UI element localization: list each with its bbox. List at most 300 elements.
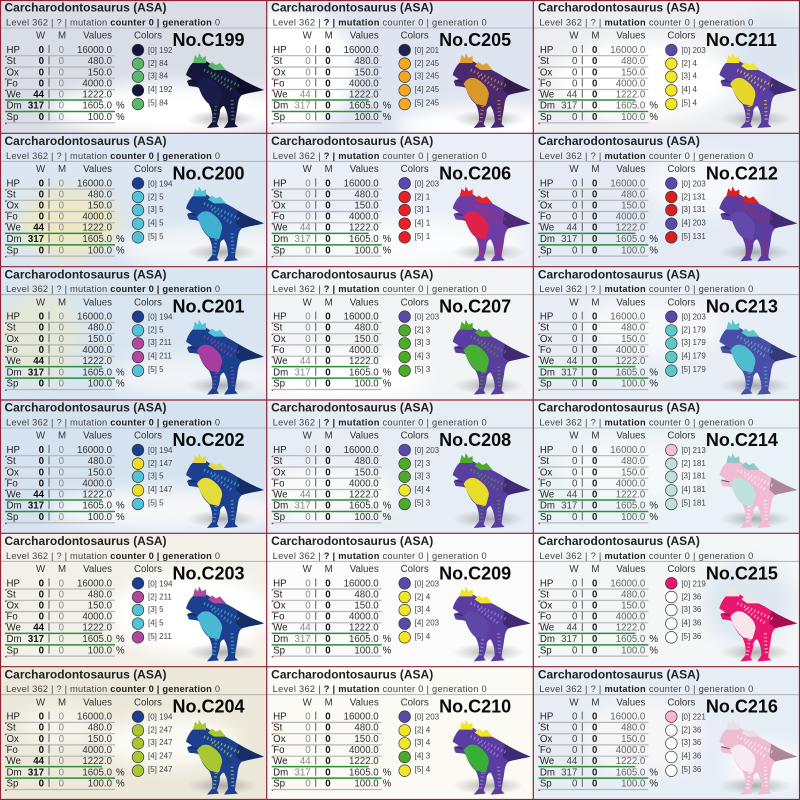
stats table: 0 <box>325 334 331 345</box>
stats table: We <box>273 356 288 367</box>
stats table: % <box>116 645 125 656</box>
stats table: 0 <box>572 312 578 323</box>
stats table: 0 <box>325 578 331 589</box>
stats table: 44 <box>567 623 578 634</box>
stats table: 0 <box>592 745 597 756</box>
stats table: Dm <box>273 234 288 245</box>
stats table: 0 <box>305 723 311 734</box>
stats table: 0 <box>59 112 65 123</box>
stats table: 16000.0 <box>344 712 379 723</box>
stats table: HP <box>540 312 553 323</box>
stats table: 4000.0 <box>616 345 646 356</box>
stats table: 0 <box>59 623 65 634</box>
stats table: Fo <box>6 78 18 89</box>
stats table: M <box>591 297 599 308</box>
stats table: 0 <box>59 712 65 723</box>
stats table: W <box>36 697 46 708</box>
color legend: [5] 1 <box>415 232 431 241</box>
stats table: HP <box>540 178 553 189</box>
stats table: 0 <box>59 345 65 356</box>
stats table: % <box>116 367 125 378</box>
stats table: 150.0 <box>621 201 646 212</box>
subtitle: Level 362 | ? | mutation counter 0 | generation 0 <box>6 151 220 161</box>
stats table: 0 <box>59 189 65 200</box>
subtitle: Level 362 | ? | mutation counter 0 | generation 0 <box>6 684 220 694</box>
stats table: St <box>6 323 16 334</box>
stats table: Colors <box>134 564 162 575</box>
stats table: 16000.0 <box>77 578 113 589</box>
stats table: 0 <box>305 512 311 523</box>
color legend: [5] 5 <box>148 365 164 374</box>
stats table: We <box>540 623 554 634</box>
stats table: 0 <box>59 445 65 456</box>
stats table: % <box>383 112 392 123</box>
color legend: [2] 36 <box>681 726 702 735</box>
stats table: 0 <box>325 212 331 223</box>
stats table: 0 <box>592 89 597 100</box>
stats table: Colors <box>667 697 695 708</box>
stats table: St <box>6 589 16 600</box>
stats table: 44 <box>300 223 311 234</box>
color legend: [2] 179 <box>681 326 706 335</box>
title: Carcharodontosaurus (ASA) <box>4 401 167 415</box>
panel: C209 <box>267 533 534 667</box>
color legend: [2] 181 <box>681 459 706 468</box>
color legend: [4] 147 <box>148 485 173 494</box>
stats table: St <box>540 456 549 467</box>
color legend: [4] 245 <box>415 85 440 94</box>
color legend: [2] 5 <box>148 192 164 201</box>
color legend: [3] 5 <box>148 605 164 614</box>
stats table: 0 <box>592 645 597 656</box>
color legend: [0] 203 <box>681 179 706 188</box>
stats table: 0 <box>572 745 578 756</box>
dinosaur <box>719 720 797 795</box>
stats table: Colors <box>667 164 695 175</box>
stats table: Dm <box>6 234 22 245</box>
stats table: St <box>6 189 16 200</box>
stats table: Ox <box>540 334 552 345</box>
stats table: 0 <box>305 345 311 356</box>
stats table: % <box>116 379 125 390</box>
stats table: 0 <box>59 45 65 56</box>
stats table: W <box>303 164 313 175</box>
stats table: 1222.0 <box>349 489 379 500</box>
stats table: % <box>383 501 392 512</box>
color legend <box>666 711 706 776</box>
stats table: % <box>116 512 125 523</box>
stats table: HP <box>6 712 20 723</box>
stats table: 0 <box>325 56 331 67</box>
subtitle: Level 362 | ? | mutation counter 0 | generation 0 <box>6 18 220 28</box>
stats table: 0 <box>325 634 331 645</box>
color legend: [4] 36 <box>681 752 702 761</box>
stats table: 0 <box>39 467 44 478</box>
stats table <box>273 431 429 523</box>
stats table: 16000.0 <box>77 45 113 56</box>
stats table: 4000.0 <box>349 478 379 489</box>
title: Carcharodontosaurus (ASA) <box>538 134 700 148</box>
stats table: M <box>591 564 599 575</box>
stats table: 100.0 <box>621 779 646 790</box>
stats table: 4000.0 <box>616 212 646 223</box>
stats table: 0 <box>39 189 44 200</box>
stats table: % <box>383 512 392 523</box>
stats table: 1222.0 <box>82 756 113 767</box>
stats table: 150.0 <box>354 334 379 345</box>
specimen number: No.C204 <box>172 697 245 717</box>
stats table: 0 <box>325 367 331 378</box>
color legend: [2] 4 <box>681 59 697 68</box>
stats table: Sp <box>540 512 552 523</box>
subtitle: Level 362 | ? | mutation counter 0 | generation 0 <box>273 418 487 428</box>
stats table: Sp <box>273 512 285 523</box>
stats table: Ox <box>6 334 19 345</box>
stats table: 100.0 <box>88 779 113 790</box>
stats table: M <box>325 564 333 575</box>
stats table: 100.0 <box>621 245 646 256</box>
stats table: 100.0 <box>621 112 646 123</box>
color legend: [0] 194 <box>148 579 173 588</box>
stats table: HP <box>273 712 287 723</box>
stats table: % <box>383 234 392 245</box>
stats table: Ox <box>540 67 552 78</box>
stats table: 0 <box>59 379 65 390</box>
stats table: Sp <box>540 112 552 123</box>
stats table: 0 <box>59 478 65 489</box>
stats table: 1222.0 <box>616 223 646 234</box>
stats table: 0 <box>592 723 597 734</box>
stats table: 4000.0 <box>349 212 379 223</box>
stats table: Values <box>350 164 379 175</box>
stats table: Fo <box>273 345 284 356</box>
stats table: 0 <box>305 189 311 200</box>
stats table: 150.0 <box>354 601 379 612</box>
color legend: [3] 5 <box>148 472 164 480</box>
stats table: 1605.0 <box>616 234 646 245</box>
stats table: 0 <box>325 723 331 734</box>
stats table <box>273 564 429 656</box>
stats table: W <box>36 31 46 42</box>
stats table: St <box>273 189 283 200</box>
stats table: 1222.0 <box>82 356 113 367</box>
dinosaur <box>186 186 264 261</box>
color legend: [2] 84 <box>148 59 169 68</box>
stats table: Dm <box>6 634 22 645</box>
stats table <box>540 31 695 123</box>
color legend: [4] 4 <box>415 485 431 494</box>
stats table: 480.0 <box>354 456 379 467</box>
stats table: 0 <box>592 712 597 723</box>
stats table: Values <box>350 31 379 42</box>
color legend: [0] 192 <box>148 46 173 55</box>
stats table: 480.0 <box>88 323 113 334</box>
stats table: Dm <box>273 634 288 645</box>
stats table: We <box>273 489 288 500</box>
panel: C214 <box>533 400 800 534</box>
stats table: 1605.0 <box>349 767 379 778</box>
stats table: 0 <box>59 78 65 89</box>
stats table: % <box>649 767 658 778</box>
stats table: % <box>649 645 658 656</box>
stats table: Sp <box>273 245 285 256</box>
stats table: 0 <box>325 45 331 56</box>
stats table: 0 <box>59 245 65 256</box>
stats table: 1605.0 <box>349 101 379 112</box>
stats table: % <box>116 112 125 123</box>
stats table: Sp <box>6 245 18 256</box>
stats table: 0 <box>592 78 597 89</box>
stats table: Sp <box>273 379 285 390</box>
color legend: [3] 4 <box>681 72 697 80</box>
stats table: 1605.0 <box>82 634 113 645</box>
stats table: 0 <box>325 767 331 778</box>
stats table: St <box>540 56 549 67</box>
stats table: 1605.0 <box>82 501 113 512</box>
stats table: 480.0 <box>88 189 113 200</box>
color legend: [4] 211 <box>148 352 172 361</box>
color legend: [3] 36 <box>681 605 702 614</box>
stats table: Colors <box>134 297 162 308</box>
color legend: [0] 203 <box>681 313 706 322</box>
color legend: [4] 179 <box>681 352 706 361</box>
stats table: HP <box>540 712 553 723</box>
stats table: 0 <box>59 323 65 334</box>
stats table: 4000.0 <box>82 478 113 489</box>
stats table: M <box>591 164 599 175</box>
subtitle: Level 362 | ? | mutation counter 0 | generation 0 <box>6 551 220 561</box>
stats table: % <box>649 379 658 390</box>
stats table: 0 <box>325 745 331 756</box>
stats table: 16000.0 <box>344 45 379 56</box>
stats table: % <box>116 767 125 778</box>
color legend: [5] 4 <box>415 765 431 774</box>
dinosaur <box>719 53 797 128</box>
stats table: 150.0 <box>354 467 379 478</box>
stats table: 16000.0 <box>610 445 646 456</box>
stats table: 1222.0 <box>616 489 646 500</box>
dinosaur <box>453 720 531 795</box>
stats table: 480.0 <box>354 589 379 600</box>
stats table: 0 <box>592 612 597 623</box>
stats table: Values <box>350 431 379 442</box>
stats table: M <box>325 31 333 42</box>
color legend: [4] 5 <box>148 218 164 227</box>
specimen number: No.C201 <box>172 297 245 317</box>
stats table: We <box>6 356 21 367</box>
stats table: 0 <box>305 78 311 89</box>
stats table: % <box>383 101 392 112</box>
stats table: % <box>383 379 392 390</box>
stats table: 0 <box>59 589 65 600</box>
dinosaur <box>453 53 531 128</box>
stats table: Sp <box>273 645 285 656</box>
stats table: 100.0 <box>354 245 379 256</box>
stats table: 0 <box>592 212 597 223</box>
stats table: 0 <box>59 612 65 623</box>
title: Carcharodontosaurus (ASA) <box>271 267 433 281</box>
stats table: 317 <box>561 767 577 778</box>
stats table: 0 <box>305 601 311 612</box>
stats table: 0 <box>325 712 331 723</box>
stats table: 0 <box>59 234 65 245</box>
stats table: Fo <box>6 745 18 756</box>
stats table: Fo <box>540 478 551 489</box>
stats table: 44 <box>33 223 45 234</box>
stats table: 1222.0 <box>349 223 379 234</box>
dinosaur <box>186 320 264 395</box>
dinosaur <box>453 186 531 261</box>
stats table: 44 <box>567 489 578 500</box>
stats table: 16000.0 <box>344 178 379 189</box>
color legend: [5] 131 <box>681 232 706 241</box>
stats table <box>6 297 162 390</box>
stats table: 1605.0 <box>616 367 646 378</box>
stats table: 0 <box>59 467 65 478</box>
stats table: 0 <box>39 379 44 390</box>
stats table: 1222.0 <box>349 89 379 100</box>
subtitle: Level 362 | ? | mutation counter 0 | generation 0 <box>6 284 220 294</box>
stats table: Dm <box>273 767 288 778</box>
stats table <box>273 297 429 390</box>
stats table <box>540 697 695 790</box>
subtitle: Level 362 | ? | mutation counter 0 | generation 0 <box>273 551 487 561</box>
color legend: [5] 3 <box>415 498 431 508</box>
stats table: 480.0 <box>88 456 113 467</box>
color legend <box>132 311 173 376</box>
stats table: 0 <box>305 612 311 623</box>
specimen number: No.C215 <box>706 563 778 583</box>
stats table: 0 <box>325 379 331 390</box>
stats table: 100.0 <box>621 512 646 523</box>
stats table: Values <box>616 431 645 442</box>
stats table: Dm <box>6 367 22 378</box>
stats table: Fo <box>273 745 284 756</box>
stats table: Values <box>350 697 379 708</box>
stats table: 0 <box>39 334 44 345</box>
stats table: Colors <box>401 31 429 42</box>
stats table: 0 <box>325 312 331 323</box>
dinosaur <box>719 453 797 528</box>
stats table: 0 <box>572 67 578 78</box>
color legend: [5] 247 <box>148 765 173 774</box>
color legend <box>399 44 440 110</box>
stats table: We <box>540 89 554 100</box>
stats table: 0 <box>592 512 597 523</box>
specimen number: No.C216 <box>706 697 778 717</box>
stats table: % <box>116 101 125 112</box>
stats table: 317 <box>28 234 44 245</box>
stats table: % <box>649 112 658 123</box>
subtitle: Level 362 | ? | mutation counter 0 | generation 0 <box>539 684 753 694</box>
stats table <box>6 697 162 790</box>
color legend: [4] 203 <box>415 618 440 627</box>
title: Carcharodontosaurus (ASA) <box>271 401 433 415</box>
stats table: Fo <box>540 345 551 356</box>
color legend: [4] 192 <box>148 85 173 94</box>
stats table: We <box>6 756 21 767</box>
stats table: 0 <box>592 489 597 500</box>
stats table: 0 <box>39 601 44 612</box>
stats table: 150.0 <box>88 67 113 78</box>
stats table: 4000.0 <box>616 478 646 489</box>
stats table: 0 <box>572 456 578 467</box>
stats table: 0 <box>592 379 597 390</box>
stats table: % <box>649 101 658 112</box>
stats table: We <box>6 89 21 100</box>
color legend <box>399 711 440 776</box>
stats table: 0 <box>572 645 578 656</box>
stats table: M <box>325 164 333 175</box>
panel: C208 <box>257 400 534 534</box>
specimen number: No.C199 <box>172 30 245 50</box>
color legend: [3] 84 <box>148 72 169 80</box>
stats table: 0 <box>592 201 597 212</box>
stats table: 4000.0 <box>616 745 646 756</box>
stats table: Dm <box>540 367 555 378</box>
stats table: Ox <box>540 467 552 478</box>
color legend: [3] 5 <box>148 205 164 214</box>
dinosaur <box>719 320 797 395</box>
stats table: W <box>569 564 579 575</box>
stats table: 0 <box>325 223 331 234</box>
stats table: HP <box>6 45 20 56</box>
stats table: 44 <box>567 89 578 100</box>
stats table: 0 <box>592 478 597 489</box>
stats table: 4000.0 <box>349 745 379 756</box>
stats table: 480.0 <box>621 589 646 600</box>
stats table <box>540 297 695 390</box>
stats table: 0 <box>592 634 597 645</box>
color legend: [4] 181 <box>681 485 706 494</box>
stats table: 44 <box>300 489 311 500</box>
panel: C212 <box>533 133 800 267</box>
stats table: 0 <box>59 512 65 523</box>
panel: C202 <box>0 400 290 534</box>
stats table: W <box>569 431 579 442</box>
subtitle: Level 362 | ? | mutation counter 0 | generation 0 <box>539 284 753 294</box>
color legend: [0] 203 <box>415 713 440 722</box>
stats table: 317 <box>561 501 577 512</box>
stats table: 0 <box>325 345 331 356</box>
stats table: 1605.0 <box>616 634 646 645</box>
stats table: % <box>383 645 392 656</box>
subtitle: Level 362 | ? | mutation counter 0 | generation 0 <box>6 418 220 428</box>
stats table: 0 <box>39 723 44 734</box>
stats table: 0 <box>592 345 597 356</box>
stats table: 1222.0 <box>616 89 646 100</box>
stats table: 150.0 <box>88 734 113 745</box>
dinosaur <box>186 720 264 795</box>
stats table: Ox <box>540 601 552 612</box>
stats table: 0 <box>59 56 65 67</box>
stats table: 0 <box>59 212 65 223</box>
stats table: W <box>36 297 46 308</box>
stats table: 0 <box>325 501 331 512</box>
stats table: 0 <box>592 356 597 367</box>
stats table: 1222.0 <box>616 756 646 767</box>
stats table: 150.0 <box>88 334 113 345</box>
stats table: Colors <box>667 431 695 442</box>
color legend: [5] 245 <box>415 98 440 108</box>
color legend: [5] 179 <box>681 365 706 374</box>
stats table: 0 <box>59 501 65 512</box>
title: Carcharodontosaurus (ASA) <box>271 667 433 681</box>
stats table: 0 <box>572 56 578 67</box>
stats table: Fo <box>540 745 551 756</box>
stats table: 0 <box>39 56 44 67</box>
stats table: Sp <box>6 112 18 123</box>
